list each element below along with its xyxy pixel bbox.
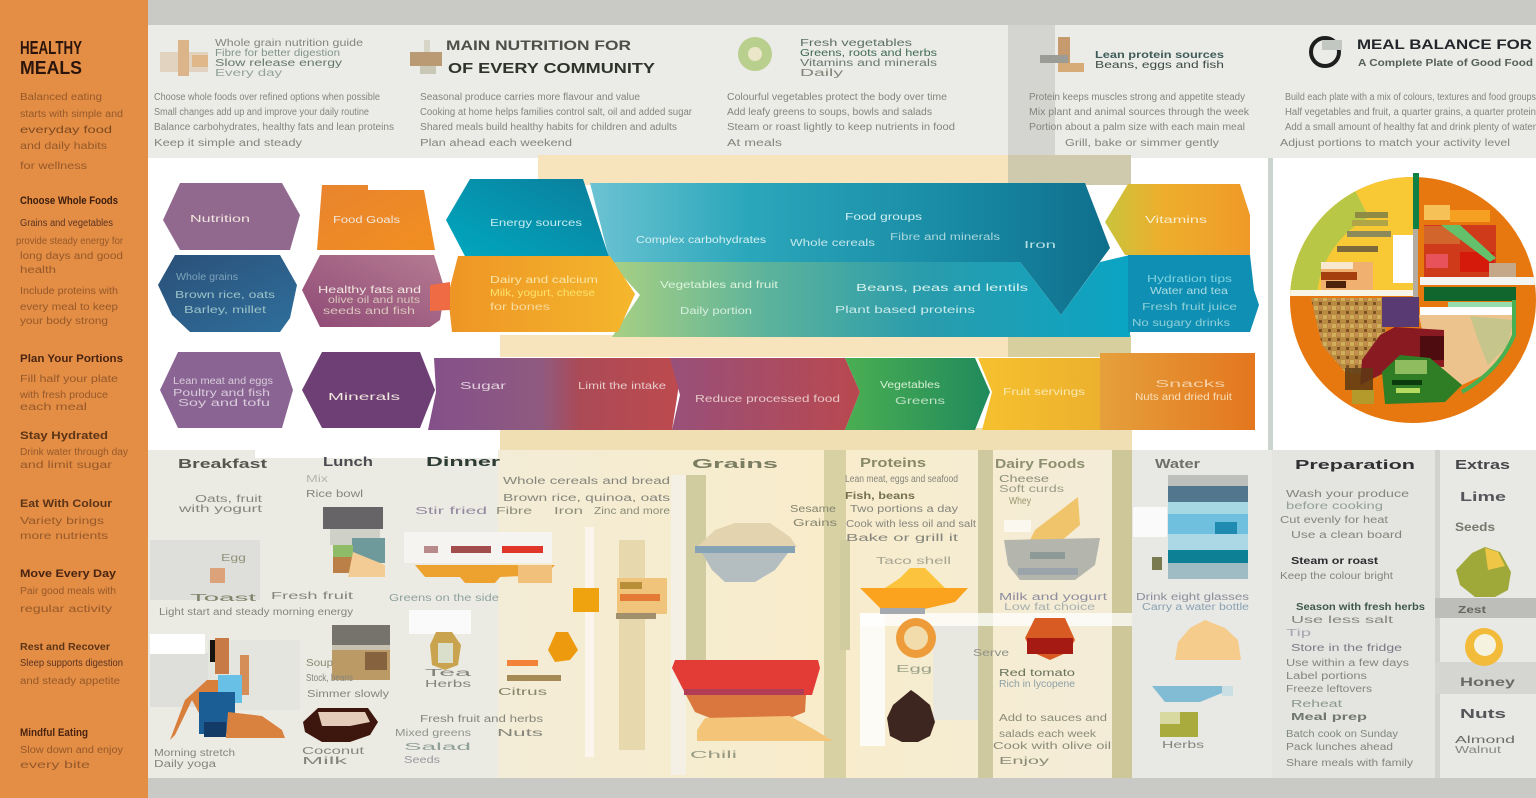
icon: utensil person xyxy=(1040,37,1084,72)
node: blue block: Hydration tips xyxy=(1147,274,1232,285)
plate: rice and chicken xyxy=(1419,315,1513,385)
panel: top text strip: Plan ahead each weekend xyxy=(420,138,572,149)
panel: orange sidebar: and limit sugar xyxy=(20,460,113,471)
node: dark purple hexagon xyxy=(302,352,435,428)
node: dark purple hexagon: Minerals xyxy=(328,392,400,403)
panel: top text strip: Add leafy greens to soups, bowls and salads xyxy=(727,107,932,118)
section: dairy notes: Rich in lycopene xyxy=(999,679,1075,690)
food: blue water panel xyxy=(1152,475,1248,579)
food: tomato xyxy=(1025,618,1075,660)
plate: red meat xyxy=(1360,327,1444,385)
panel: orange sidebar: Move Every Day xyxy=(20,568,117,580)
section: dinner dishes: Stir fried xyxy=(415,506,487,517)
arrow: yellow: Fruit servings xyxy=(1003,387,1085,398)
food: peach dumpling xyxy=(1175,620,1241,660)
panel: orange sidebar: Fill half your plate xyxy=(20,374,119,385)
food: rice bowl xyxy=(695,504,837,582)
section: grains text: Whole cereals and bread xyxy=(503,476,670,487)
plate: top-right tomato xyxy=(1424,205,1516,277)
arrow: mauve to red: Reduce processed food xyxy=(695,394,840,405)
panel: orange sidebar: Plan Your Portions xyxy=(20,353,123,365)
section: preparation text: Batch cook on Sunday xyxy=(1286,729,1398,740)
band: large teal arrow: Fibre and minerals xyxy=(890,232,1000,243)
food: jar two xyxy=(306,625,390,700)
panel: top text strip: Shared meals build healthy habits for children and adults xyxy=(420,122,677,133)
section: water notes: Drink eight glasses xyxy=(1136,592,1249,603)
section: preparation text: Pack lunches ahead xyxy=(1286,742,1393,753)
node: purple hexagon lower: Soy and tofu xyxy=(178,398,270,409)
food: dark fruit xyxy=(887,690,935,742)
panel: orange sidebar: Variety brings xyxy=(20,516,104,527)
panel: orange sidebar: health xyxy=(20,265,56,276)
node: orange tab xyxy=(317,185,435,250)
food: red bowl with fries xyxy=(672,660,833,761)
panel: top text strip: Portion about a palm size with each main meal xyxy=(1029,122,1245,133)
band: large teal arrow: Whole cereals xyxy=(790,238,875,249)
section: preparation text: Cut evenly for heat xyxy=(1280,515,1388,526)
node: yellow to orange block xyxy=(1105,184,1250,255)
section: breakfast: Egg xyxy=(221,553,246,564)
section: dairy notes: Cook with olive oil xyxy=(993,741,1111,752)
section: protein text xyxy=(845,474,976,675)
panel: orange sidebar: Stay Hydrated xyxy=(20,430,108,442)
panel: top text strip: At meals xyxy=(727,138,782,149)
sidebar title: MEALS xyxy=(20,58,82,78)
section: preparation text: Steam or roast xyxy=(1291,556,1379,567)
plate: toast slices xyxy=(1321,262,1373,290)
section: breakfast: Oats, fruit xyxy=(195,494,262,505)
node: purple hexagon xyxy=(163,183,300,250)
section: preparation text: Label portions xyxy=(1286,671,1367,682)
section: grains text: Mixed greens xyxy=(395,728,471,739)
node: mauve hexagon xyxy=(302,255,445,327)
plate: dark grains corner xyxy=(1345,368,1373,390)
cream column backdrop xyxy=(150,450,1536,778)
panel: orange sidebar: Mindful Eating xyxy=(20,727,88,739)
plate: white rim at right xyxy=(1420,307,1514,321)
band: green to blue: Plant based proteins xyxy=(835,305,975,316)
panel: orange sidebar: Grains and vegetables xyxy=(20,218,113,229)
sidebar title xyxy=(20,38,82,78)
node: navy hexagon: Whole grains xyxy=(176,272,238,283)
arrow: purple to red: Sugar xyxy=(460,381,507,392)
node: blue block: Water and tea xyxy=(1150,286,1229,297)
panel: top text strip: Fresh vegetables xyxy=(800,38,912,49)
panel: orange sidebar: Pair good meals with xyxy=(20,586,116,597)
heading: meal summary: A Complete Plate of Good Food xyxy=(1358,58,1533,69)
node: blue block xyxy=(1128,255,1259,332)
node: teal hexagon xyxy=(446,179,610,260)
section headings: Lunch xyxy=(323,454,373,469)
section: dairy: Whey xyxy=(1009,496,1031,507)
heading: central topic: OF EVERY COMMUNITY xyxy=(448,60,655,77)
panel: top text strip: Protein keeps muscles strong and appetite steady xyxy=(1029,92,1245,103)
food: coconut bowl: Milk xyxy=(302,756,350,767)
section headings xyxy=(178,454,1510,472)
section: dairy notes: Enjoy xyxy=(999,756,1049,767)
food: jar two: Soup xyxy=(306,658,334,669)
section: water notes: Carry a water bottle xyxy=(1142,602,1250,613)
section: breakfast: Toast xyxy=(190,593,257,604)
chart: balanced plate xyxy=(1285,170,1536,430)
panel: orange sidebar: your body strong xyxy=(20,316,108,327)
panel: top text strip: Lean protein sources xyxy=(1095,50,1225,61)
section: extras: Almond xyxy=(1455,735,1515,746)
section: preparation text: Meal prep xyxy=(1291,712,1367,723)
sidebar title: HEALTHY xyxy=(20,38,82,58)
panel: orange sidebar: for wellness xyxy=(20,161,87,172)
section: grains text: Nuts xyxy=(497,728,543,739)
section: preparation text: Reheat xyxy=(1291,699,1342,710)
icon: sitting person xyxy=(170,638,285,740)
node: orange yellow arrow: Dairy and calcium xyxy=(490,275,598,286)
panel: orange sidebar: Drink water through day xyxy=(20,447,128,458)
node: blue block: Fresh fruit juice xyxy=(1142,302,1238,313)
heading: central topic: MAIN NUTRITION FOR xyxy=(446,37,631,53)
panel: top text strip: Colourful vegetables protect the body over time xyxy=(727,92,947,103)
panel: top text strip: Grill, bake or simmer gently xyxy=(1065,138,1219,149)
food: olive herb xyxy=(1160,712,1204,751)
panel: top text strip: Beans, eggs and fish xyxy=(1095,60,1224,71)
arrow: green xyxy=(845,358,990,430)
icon: green leaf badge xyxy=(738,37,772,71)
flowchart: row 2 xyxy=(158,255,1259,337)
icon: grain and carrot xyxy=(160,40,208,76)
panel: bottom food sections xyxy=(150,450,1536,778)
heading: meal summary xyxy=(1357,36,1533,69)
food: coconut bowl xyxy=(154,708,378,770)
plate: white gap xyxy=(1393,235,1413,283)
band: green to blue: Vegetables and fruit xyxy=(660,280,778,291)
section: extras: Zest xyxy=(1458,605,1487,616)
panel: orange sidebar: Slow down and enjoy xyxy=(20,745,123,756)
food: cheese wedge and bowl: Milk and yogurt xyxy=(999,592,1107,603)
panel: top text strip xyxy=(154,36,1536,149)
panel: orange sidebar: Eat With Colour xyxy=(20,498,113,510)
food: cheese wedge and bowl xyxy=(999,497,1107,613)
node: navy hexagon xyxy=(158,255,297,332)
icon: orange fruit xyxy=(548,632,578,662)
food: jar two: Simmer slowly xyxy=(307,689,389,700)
food: coconut bowl: Morning stretch xyxy=(154,748,235,759)
icon: lime fruit xyxy=(1456,547,1511,597)
section: grains text: Seeds xyxy=(404,755,440,766)
panel: orange sidebar: Include proteins with xyxy=(20,286,118,297)
section: preparation text: Share meals with family xyxy=(1286,758,1413,769)
heading: meal summary: MEAL BALANCE FOR xyxy=(1357,36,1532,52)
section: breakfast: Light start and steady morning energy xyxy=(159,607,353,618)
section: grains text: Brown rice, quinoa, oats xyxy=(503,493,670,504)
section: preparation text: before cooking xyxy=(1286,501,1383,512)
section: protein text: Two portions a day xyxy=(850,504,958,515)
panel: top text strip: Adjust portions to match your activity level xyxy=(1280,138,1510,149)
food: golden taco xyxy=(860,568,968,614)
node: mauve hexagon: Healthy fats and xyxy=(318,285,421,296)
plate: green salad xyxy=(1382,355,1462,404)
panel: orange sidebar: Sleep supports digestion xyxy=(20,658,123,669)
heading: central topic xyxy=(446,37,655,77)
section: preparation text: Store in the fridge xyxy=(1291,643,1403,654)
panel: orange sidebar: with fresh produce xyxy=(19,390,108,401)
food: blue bowl xyxy=(1152,686,1233,702)
panel: top text strip: Whole grain nutrition guide xyxy=(215,38,364,49)
section headings: Dinner xyxy=(426,454,500,469)
node: mauve hexagon: olive oil and nuts xyxy=(328,295,420,306)
arrow: purple to red: Limit the intake xyxy=(578,381,667,392)
section: dairy notes: Red tomato xyxy=(999,668,1076,679)
section: dairy notes: Serve xyxy=(973,648,1010,659)
food: jar one: Mix xyxy=(306,474,328,485)
panel: orange sidebar: everyday food xyxy=(20,125,112,136)
flowchart: row 1 xyxy=(163,179,1250,315)
food: jar one xyxy=(306,474,385,577)
node: orange yellow arrow xyxy=(430,256,635,332)
section: dairy: Soft curds xyxy=(999,484,1064,495)
section: preparation text: Freeze leftovers xyxy=(1286,684,1372,695)
section: extras: Lime xyxy=(1460,489,1506,504)
section: dinner dishes: Greens on the side xyxy=(389,593,500,604)
band: green to blue: Daily portion xyxy=(680,306,752,317)
section: dairy: Cheese xyxy=(999,474,1050,485)
node: navy hexagon: Brown rice, oats xyxy=(175,290,275,301)
section: grains text: Zinc and more xyxy=(594,506,671,517)
section: extras: Seeds xyxy=(1455,520,1495,534)
section headings: Water xyxy=(1155,456,1200,471)
section: preparation text: Use within a few days xyxy=(1286,658,1409,669)
food: rice bowl: Sesame xyxy=(790,504,837,515)
icon: dish xyxy=(410,40,442,74)
icon: egg ring xyxy=(896,618,936,658)
panel: orange sidebar: starts with simple and xyxy=(20,109,123,120)
section: grains text: Iron xyxy=(554,506,583,517)
arrow: mauve to red xyxy=(670,358,860,430)
section: preparation text: Wash your produce xyxy=(1286,489,1410,500)
section: grains text: Citrus xyxy=(498,687,547,698)
section headings: Dairy Foods xyxy=(995,456,1085,471)
panel: top text strip: Fibre for better digestion xyxy=(215,48,340,59)
plate: top-left yellow quadrant xyxy=(1285,175,1415,295)
section: water notes xyxy=(1136,592,1250,613)
section: grains text: Fibre xyxy=(496,506,533,517)
band: large teal arrow xyxy=(590,183,1110,315)
section: grains text: Tea xyxy=(425,668,472,679)
panel: top text strip: Seasonal produce carries more flavour and value xyxy=(420,92,640,103)
panel: top text strip: Keep it simple and steady xyxy=(154,138,302,149)
panel: orange sidebar: Balanced eating xyxy=(20,92,102,103)
section: protein text: Egg xyxy=(896,664,932,675)
band: green to blue: Beans, peas and lentils xyxy=(856,283,1028,294)
plate: green label bar xyxy=(1424,287,1516,307)
arrow: yellow xyxy=(978,358,1103,430)
panel: orange sidebar: and steady appetite xyxy=(20,676,120,687)
food: rice bowl: Grains xyxy=(793,518,837,529)
node: orange yellow arrow: Milk, yogurt, cheese xyxy=(490,288,596,299)
section: dairy xyxy=(999,474,1064,507)
section: breakfast: with yogurt xyxy=(177,504,262,515)
food: coconut bowl: Daily yoga xyxy=(154,759,217,770)
section headings: Breakfast xyxy=(178,456,268,471)
section: protein text: Cook with less oil and salt xyxy=(846,519,976,530)
section: protein text: Taco shell xyxy=(876,556,951,567)
panel: orange sidebar: each meal xyxy=(20,402,87,413)
arrow: orange: Snacks xyxy=(1155,379,1225,390)
panel: top text strip: Balance carbohydrates, healthy fats and lean proteins xyxy=(154,122,394,133)
food: olive herb: Herbs xyxy=(1162,740,1204,751)
section: extras: Nuts xyxy=(1460,706,1506,721)
food: jar one: Rice bowl xyxy=(306,489,363,500)
panel: top text strip: Vitamins and minerals xyxy=(800,58,937,69)
section: protein text: Fish, beans xyxy=(845,491,916,502)
panel: top text strip: Mix plant and animal sources through the week xyxy=(1029,107,1250,118)
food: layered snack xyxy=(616,578,667,619)
flowchart: row 3 xyxy=(160,352,1255,430)
section: dinner dishes xyxy=(389,506,555,634)
node: purple hexagon lower: Poultry and fish xyxy=(173,388,270,399)
food: coconut bowl: Coconut xyxy=(302,746,364,757)
panel: orange sidebar: more nutrients xyxy=(20,531,108,542)
food: red bowl with fries: Chili xyxy=(690,750,737,761)
section: extras: Walnut xyxy=(1455,745,1501,756)
panel: top text strip: Daily xyxy=(800,68,843,79)
icon: orange drop xyxy=(573,588,599,612)
section headings: Extras xyxy=(1455,457,1510,472)
icon: yellow ring xyxy=(1465,628,1503,666)
section: grains text xyxy=(395,476,671,766)
panel: orange sidebar: long days and good xyxy=(20,251,123,262)
section: preparation text: Use a clean board xyxy=(1291,530,1402,541)
panel: top text strip: Steam or roast lightly to keep nutrients in food xyxy=(727,122,955,133)
icon: small lantern xyxy=(430,632,461,670)
section: preparation text: Tip xyxy=(1286,628,1312,639)
section: grains text: Herbs xyxy=(425,679,471,690)
panel: orange sidebar xyxy=(0,0,148,798)
arrow: green: Vegetables xyxy=(880,380,940,391)
node: blue block: No sugary drinks xyxy=(1132,318,1230,329)
node: purple hexagon lower xyxy=(160,352,293,428)
arrow: green: Greens xyxy=(895,396,945,407)
section headings: Preparation xyxy=(1295,457,1415,472)
band: green to blue xyxy=(610,255,1130,337)
panel: top text strip: Every day xyxy=(215,68,282,79)
section: preparation text: Keep the colour bright xyxy=(1280,571,1393,582)
node: teal hexagon: Energy sources xyxy=(490,218,582,229)
band: large teal arrow: Iron xyxy=(1024,240,1056,251)
panel: orange sidebar: every meal to keep xyxy=(20,302,118,313)
section: extras: Honey xyxy=(1460,675,1515,689)
section headings: Proteins xyxy=(860,455,926,470)
node: yellow to orange block: Vitamins xyxy=(1145,215,1207,226)
arrow: orange: Nuts and dried fruit xyxy=(1135,392,1232,403)
section: dairy notes xyxy=(973,648,1111,767)
panel: orange sidebar: provide steady energy for xyxy=(16,236,124,247)
section: preparation text: Use less salt xyxy=(1291,615,1393,626)
decorative cream bands xyxy=(500,155,1273,452)
panel: orange sidebar: every bite xyxy=(20,760,91,771)
arrow: purple to red xyxy=(428,358,680,430)
section: extras xyxy=(1455,489,1515,756)
panel: top text strip: Cooking at home helps families control salt, oil and added sugar xyxy=(420,107,693,118)
section: grains text: Fresh fruit and herbs xyxy=(420,714,543,725)
panel: orange sidebar: regular activity xyxy=(20,604,112,615)
food: jar two: Stock, beans xyxy=(306,673,353,684)
panel: top text strip: Choose whole foods over refined options when possible xyxy=(154,92,380,103)
panel: orange sidebar: Rest and Recover xyxy=(20,642,110,653)
section: preparation text xyxy=(1280,489,1425,769)
node: orange yellow arrow: for bones xyxy=(490,302,550,313)
node: orange tab: Food Goals xyxy=(333,215,400,226)
node: navy hexagon: Barley, millet xyxy=(184,305,266,316)
section: breakfast: Fresh fruit xyxy=(271,591,353,602)
panel: orange sidebar: Choose Whole Foods xyxy=(20,195,118,207)
section: dairy notes: salads each week xyxy=(999,729,1097,740)
panel: top text strip: Slow release energy xyxy=(215,58,342,69)
section: breakfast xyxy=(159,494,353,618)
band: large teal arrow: Food groups xyxy=(845,212,922,223)
band: large teal arrow: Complex carbohydrates xyxy=(636,235,766,246)
plate: purple beets xyxy=(1382,297,1419,327)
node: purple hexagon lower: Lean meat and eggs xyxy=(173,376,273,387)
section headings: Grains xyxy=(692,456,778,471)
panel: top text strip: Greens, roots and herbs xyxy=(800,48,937,59)
node: purple hexagon: Nutrition xyxy=(190,214,250,225)
section: protein text: Lean meat, eggs and seafood xyxy=(845,474,958,485)
food: cheese wedge and bowl: Low fat choice xyxy=(1004,602,1096,613)
section: preparation text: Season with fresh herbs xyxy=(1296,602,1425,613)
section: protein text: Bake or grill it xyxy=(846,533,958,544)
node: mauve hexagon: seeds and fish xyxy=(323,306,415,317)
panel: orange sidebar: and daily habits xyxy=(20,141,107,152)
arrow: orange xyxy=(1100,353,1255,430)
panel: top text strip: Small changes add up and improve your daily routine xyxy=(154,107,369,118)
icon: ring gauge xyxy=(1311,38,1342,66)
plate: grains xyxy=(1311,298,1386,378)
section: dairy notes: Add to sauces and xyxy=(999,713,1107,724)
section: grains text: Salad xyxy=(404,742,471,753)
